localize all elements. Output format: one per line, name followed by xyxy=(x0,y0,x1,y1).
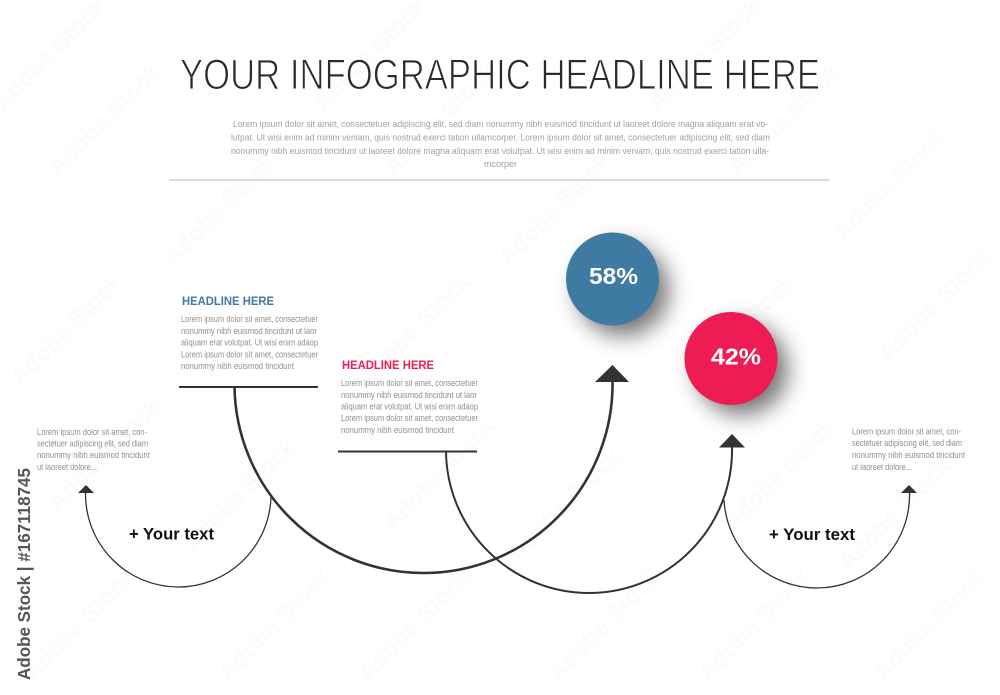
red body text: Lorem ipsum dolor sit amet, consectetuer xyxy=(341,378,478,388)
intro paragraph: mcorper xyxy=(484,159,517,170)
watermark pattern: Adobe Stock xyxy=(5,268,129,391)
blue body text: Lorem ipsum dolor sit amet, consectetuer xyxy=(181,350,318,360)
watermark pattern: Adobe Stock xyxy=(493,148,617,271)
blue percentage circle: 58% xyxy=(589,263,638,289)
left label: + Your text xyxy=(129,524,214,544)
red body text: nonummy nibh euismod tincidunt xyxy=(341,425,454,435)
red body text: Lorem ipsum dolor sit amet, consectetuer xyxy=(341,413,478,423)
watermark pattern: Adobe Stock xyxy=(378,58,502,181)
left note text: Lorem ipsum dolor sit amet, con- xyxy=(37,427,147,437)
left note text: sectetuer adipiscing elit, sed diam xyxy=(37,438,148,448)
watermark pattern: Adobe Stock xyxy=(178,433,302,556)
panel: blue text block xyxy=(181,294,318,371)
blue body text xyxy=(181,314,318,371)
watermark pattern: Adobe Stock xyxy=(213,563,337,686)
red percentage circle: 42% xyxy=(711,344,761,370)
intro paragraph: nonummy nibh euismod tincidunt ut laoreet dolore magna aliquam erat volutpat. Ut wisi enim ad minim veniam, quis nostrud exerci tation ulla- xyxy=(231,146,769,157)
watermark pattern: Adobe Stock xyxy=(378,413,502,536)
watermark pattern: Adobe Stock xyxy=(723,58,847,181)
watermark pattern: Adobe Stock xyxy=(353,268,477,391)
right label: + Your text xyxy=(769,525,855,544)
arrow: large blue-block arc xyxy=(179,365,629,573)
blue percentage circle xyxy=(566,232,669,336)
watermark pattern: Adobe Stock xyxy=(693,563,817,686)
watermark pattern: Adobe Stock xyxy=(543,563,667,686)
blue body text: aliquam erat volutpat. Ut wisi enim adaop xyxy=(181,338,318,348)
red body text: aliquam erat volutpat. Ut wisi enim adaop xyxy=(341,402,478,412)
watermark pattern: Adobe Stock xyxy=(873,243,997,366)
right note text: nonummy nibh euismod tincidunt xyxy=(852,450,965,460)
left note text xyxy=(37,427,150,472)
vertical stock credit: Adobe Stock | #167118745 xyxy=(14,468,34,680)
intro paragraph: lutpat. Ut wisi enim ad minim veniam, quis nostrud exerci tation ullamcorper. Lorem ipsum dolor sit amet, consectetuer adipiscing elit, sed diam xyxy=(231,132,770,144)
left note text: ut laoreet dolore... xyxy=(37,462,97,472)
blue body text: nonummy nibh euismod tincidunt xyxy=(181,361,294,371)
right note text: ut laoreet dolore... xyxy=(852,462,912,472)
blue body text: nonummy nibh euismod tincidunt ut laor xyxy=(181,326,317,336)
left note text: nonummy nibh euismod tincidunt xyxy=(37,450,150,460)
watermark pattern: Adobe Stock xyxy=(718,413,842,536)
arrow: small right arc xyxy=(724,485,917,588)
right note text xyxy=(852,426,965,472)
red body text xyxy=(341,378,478,435)
watermark pattern: Adobe Stock xyxy=(678,268,802,391)
watermark pattern: Adobe Stock xyxy=(43,58,167,181)
arrow: large red-block arc xyxy=(338,434,745,593)
heading: red: HEADLINE HERE xyxy=(342,358,434,372)
right note text: sectetuer adipiscing elit, sed diam xyxy=(852,438,962,448)
arrow: small left arc xyxy=(78,485,271,587)
watermark pattern: Adobe Stock xyxy=(43,393,167,516)
panel: red text block xyxy=(341,358,478,435)
right note text: Lorem ipsum dolor sit amet, con- xyxy=(852,426,961,436)
watermark pattern: Adobe Stock xyxy=(18,563,142,686)
blue body text: Lorem ipsum dolor sit amet, consectetuer xyxy=(181,314,318,324)
intro paragraph xyxy=(231,119,770,170)
watermark pattern: Adobe Stock xyxy=(353,563,477,686)
watermark pattern: Adobe Stock xyxy=(833,453,957,576)
watermark pattern: Adobe Stock xyxy=(503,443,627,566)
watermark pattern: Adobe Stock xyxy=(868,563,992,686)
intro paragraph: Lorem ipsum dolor sit amet, consectetuer adipiscing elit, sed diam nonummy nibh euismod tincidunt ut laoreet dolore magna aliquam erat vo- xyxy=(233,119,768,130)
watermark pattern: Adobe Stock xyxy=(828,123,952,246)
title: YOUR INFOGRAPHIC HEADLINE HERE xyxy=(180,51,820,99)
watermark pattern: Adobe Stock xyxy=(158,148,282,271)
heading: blue: HEADLINE HERE xyxy=(182,294,274,308)
red body text: nonummy nibh euismod tincidunt ut laor xyxy=(341,390,477,400)
red percentage circle xyxy=(684,312,788,415)
